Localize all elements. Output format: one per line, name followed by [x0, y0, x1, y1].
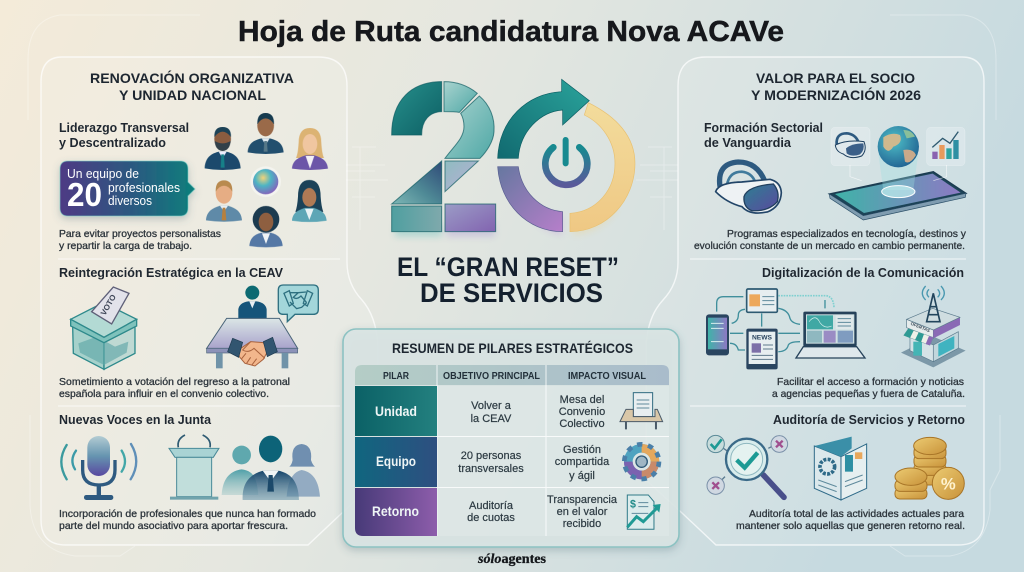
title: Hoja de Ruta candidatura Nova ACAVe: [238, 16, 784, 48]
icon: report chart: $: [630, 498, 636, 510]
central heading: DE SERVICIOS: [420, 278, 603, 308]
row: Equipo: [355, 437, 659, 487]
icon: coins: [895, 437, 964, 499]
row: Equipo: Gestión: [563, 444, 601, 456]
text: CEAV description: española para influir en el convenio colectivo.: [59, 388, 269, 400]
table header row: [355, 365, 669, 385]
central heading: [397, 252, 619, 308]
table header row: IMPACTO VISUAL: [568, 371, 646, 382]
laptop: [796, 312, 865, 358]
text: digitalization description: Facilitar el acceso a formación y noticias: [777, 376, 964, 388]
row: Unidad: Convenio: [559, 406, 605, 418]
icon: shop with antenna: OFERTAS: [910, 321, 931, 333]
awning: [904, 329, 933, 345]
row: Unidad: Volver a: [471, 400, 512, 412]
central heading: EL “GRAN RESET”: [397, 252, 619, 282]
text: CEAV description: [59, 376, 290, 400]
handshake: [228, 337, 277, 366]
icon: silhouettes: [222, 436, 320, 500]
row: Retorno: Transparencia: [547, 494, 618, 506]
callout: team of 20: profesionales: [108, 181, 180, 195]
text: digitalization description: [772, 376, 965, 400]
person 4: [206, 180, 242, 222]
news tablet: [746, 329, 778, 369]
VR tile: [831, 127, 870, 166]
text: CEAV description: Sometimiento a votación del regreso a la patronal: [59, 376, 290, 388]
row: Equipo: Equipo: [376, 453, 416, 469]
digit 0 with arrow: [498, 79, 635, 232]
web page: [747, 289, 777, 312]
speech bubble: [278, 285, 318, 322]
icon: brochure: [814, 437, 867, 500]
icon: shop with antenna: [901, 286, 966, 367]
subheading: training: [704, 120, 823, 150]
icon: ballot box: VOTO: [99, 293, 118, 317]
subheading: audit: Auditoría de Servicios y Retorno: [773, 412, 965, 427]
logo: soloagentes: sóloagentes: [477, 551, 546, 566]
row: Unidad: [355, 386, 663, 436]
row: Retorno: Auditoría: [469, 500, 514, 512]
person 2: [248, 113, 284, 154]
subheading: new voices: Nuevas Voces en la Junta: [59, 412, 212, 427]
icon: magnifier audit: [707, 435, 788, 497]
table heading: RESUMEN DE PILARES ESTRATÉGICOS: [392, 340, 633, 356]
row: Unidad: Colectivo: [559, 418, 605, 430]
digit 2: [392, 82, 496, 232]
callout: team of 20: 20: [67, 176, 102, 213]
person 1: [205, 127, 241, 170]
text: training description: evolución constante de un mercado en cambio permanente.: [694, 240, 965, 252]
row: Equipo: compartida: [555, 456, 610, 468]
row: Retorno: en el valor: [557, 506, 608, 518]
news tablet: NEWS: [752, 334, 773, 341]
callout: team of 20: Un equipo de: [67, 167, 139, 181]
subheading: leadership: [59, 120, 189, 150]
row: Retorno: Retorno: [372, 503, 419, 519]
text: audit description: [736, 508, 965, 532]
central orb: [250, 166, 281, 197]
row: Retorno: [355, 488, 661, 536]
panel heading: Y UNIDAD NACIONAL: [119, 87, 266, 103]
phone: [706, 314, 729, 355]
panel heading: RENOVACIÓN ORGANIZATIVA: [90, 69, 294, 86]
icon: power: [545, 140, 587, 185]
panel: organizational renewal: [41, 57, 378, 545]
icon: podium: [169, 435, 219, 500]
text: audit description: Auditoría total de las actividades actuales para: [749, 508, 964, 520]
icon: ballot box: [71, 287, 137, 369]
callout: team of 20: [60, 161, 195, 216]
panel: strategic pillars table: [343, 329, 679, 547]
table header row: PILAR: [383, 371, 410, 382]
text: leadership note: y repartir la carga de trabajo.: [59, 240, 192, 252]
chart tile: [927, 127, 965, 166]
row: Retorno: recibido: [563, 518, 601, 530]
text: leadership note: [59, 228, 221, 252]
icon: microphone: [61, 436, 136, 500]
icon: tablet and globe: [829, 126, 966, 220]
row: Equipo: 20 personas: [461, 450, 522, 462]
table header row: OBJETIVO PRINCIPAL: [443, 371, 540, 382]
icon: report chart: [627, 495, 661, 529]
row: Unidad: Mesa del: [560, 394, 604, 406]
panel heading: [90, 69, 294, 103]
text: digitalization description: a agencias pequeñas y fuera de Cataluña.: [772, 388, 965, 400]
central 20 reset graphic: [392, 79, 635, 237]
icon: coins: %: [941, 474, 956, 493]
person 5: [292, 180, 327, 222]
text: new voices description: parte del mundo asociativo para aportar frescura.: [59, 520, 288, 532]
row: Unidad: Unidad: [375, 403, 417, 419]
subheading: CEAV: Reintegración Estratégica en la CEAV: [59, 265, 283, 280]
panel heading: VALOR PARA EL SOCIO: [756, 70, 915, 86]
row: Unidad: la CEAV: [471, 413, 512, 425]
text: new voices description: [59, 508, 316, 532]
icon: VR headset: [716, 162, 781, 213]
text: training description: [694, 228, 967, 252]
row: Retorno: de cuotas: [467, 512, 515, 524]
person 3: [292, 128, 328, 170]
row: Equipo: y ágil: [569, 470, 595, 482]
subheading: leadership: y Descentralizado: [59, 135, 166, 150]
text: audit description: mantener solo aquellas que generen retorno real.: [736, 520, 965, 532]
text: new voices description: Incorporación de profesionales que nunca han formado: [59, 508, 316, 520]
panel heading: [751, 70, 921, 103]
person 6: [249, 206, 283, 247]
row: Equipo: transversales: [458, 463, 524, 475]
callout: team of 20: diversos: [108, 194, 152, 208]
text: training description: Programas especializados en tecnología, destinos y: [727, 228, 967, 240]
subheading: digitalization: Digitalización de la Comunicación: [762, 265, 964, 280]
icon: team circle: [205, 113, 328, 247]
icon: gear: [624, 444, 659, 479]
panel: member value: [646, 57, 984, 545]
subheading: leadership: Liderazgo Transversal: [59, 120, 189, 135]
text: leadership note: Para evitar proyectos personalistas: [59, 228, 221, 240]
icon: devices network: [706, 289, 865, 369]
subheading: training: de Vanguardia: [704, 135, 792, 150]
panel heading: Y MODERNIZACIÓN 2026: [751, 86, 921, 103]
subheading: training: Formación Sectorial: [704, 120, 823, 135]
icon: table document: [620, 393, 663, 429]
icon: negotiation table: [207, 285, 318, 368]
